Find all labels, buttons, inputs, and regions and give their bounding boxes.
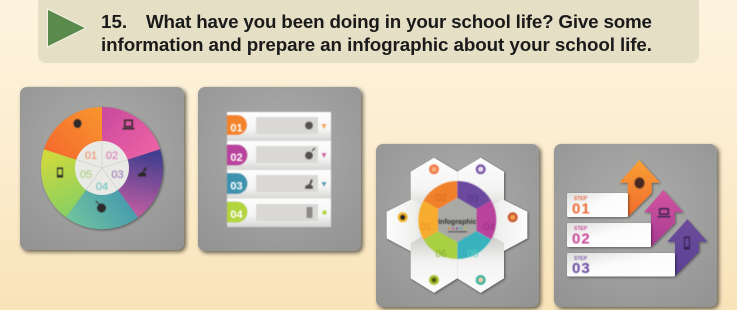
ring numbers: 04 — [483, 222, 495, 233]
wheel numbers: 01 — [85, 150, 97, 162]
white stacked rows — [227, 112, 331, 227]
step bars — [567, 193, 675, 276]
panel: step list infographic — [198, 87, 361, 251]
row numbers — [230, 122, 243, 221]
wheel numbers: 05 — [80, 169, 92, 181]
wheel numbers: 03 — [111, 169, 124, 181]
hexagon icons — [398, 164, 518, 285]
row numbers: 04 — [230, 209, 243, 221]
step labels: 02 — [572, 230, 591, 248]
arrow: orange — [619, 160, 660, 217]
step labels: STEP — [574, 196, 588, 202]
wheel numbers: 02 — [106, 150, 118, 162]
ring numbers: 03 — [467, 194, 479, 205]
ring numbers: 01 — [420, 222, 432, 233]
step labels: 03 — [572, 260, 591, 277]
centre title: Infographic — [438, 219, 476, 226]
ring numbers — [420, 193, 495, 260]
heading: question text: What have you been doing in your school life? Give some — [146, 11, 652, 32]
banner — [38, 0, 699, 63]
pie chart wheel — [41, 107, 163, 229]
icon: green play triangle — [48, 9, 86, 47]
coloured ring — [418, 181, 496, 259]
heading: question text: 15. — [101, 11, 127, 32]
panel: arrows infographic — [554, 144, 717, 307]
white hexagons — [387, 158, 527, 293]
wheel icons — [57, 119, 147, 212]
row numbers: 02 — [230, 152, 243, 164]
arrow: purple — [667, 219, 707, 276]
wheel numbers: 04 — [96, 181, 108, 193]
row numbers: 01 — [230, 122, 243, 134]
panel: pie infographic — [20, 87, 184, 250]
ring numbers: 05 — [467, 249, 479, 260]
wheel numbers — [80, 150, 124, 193]
arrow icons — [634, 178, 690, 250]
centre title — [438, 219, 476, 232]
row numbers: 03 — [230, 180, 243, 192]
step labels: STEP — [574, 226, 588, 232]
heading: question text: information and prepare an infographic about your school life. — [101, 34, 652, 55]
ring numbers: 06 — [435, 249, 447, 260]
step labels: 01 — [572, 200, 591, 218]
panel: hexagon infographic — [376, 144, 539, 307]
ring numbers: 02 — [435, 193, 447, 204]
step labels: STEP — [574, 256, 588, 262]
step labels — [572, 196, 591, 277]
arrow: magenta — [644, 190, 683, 247]
